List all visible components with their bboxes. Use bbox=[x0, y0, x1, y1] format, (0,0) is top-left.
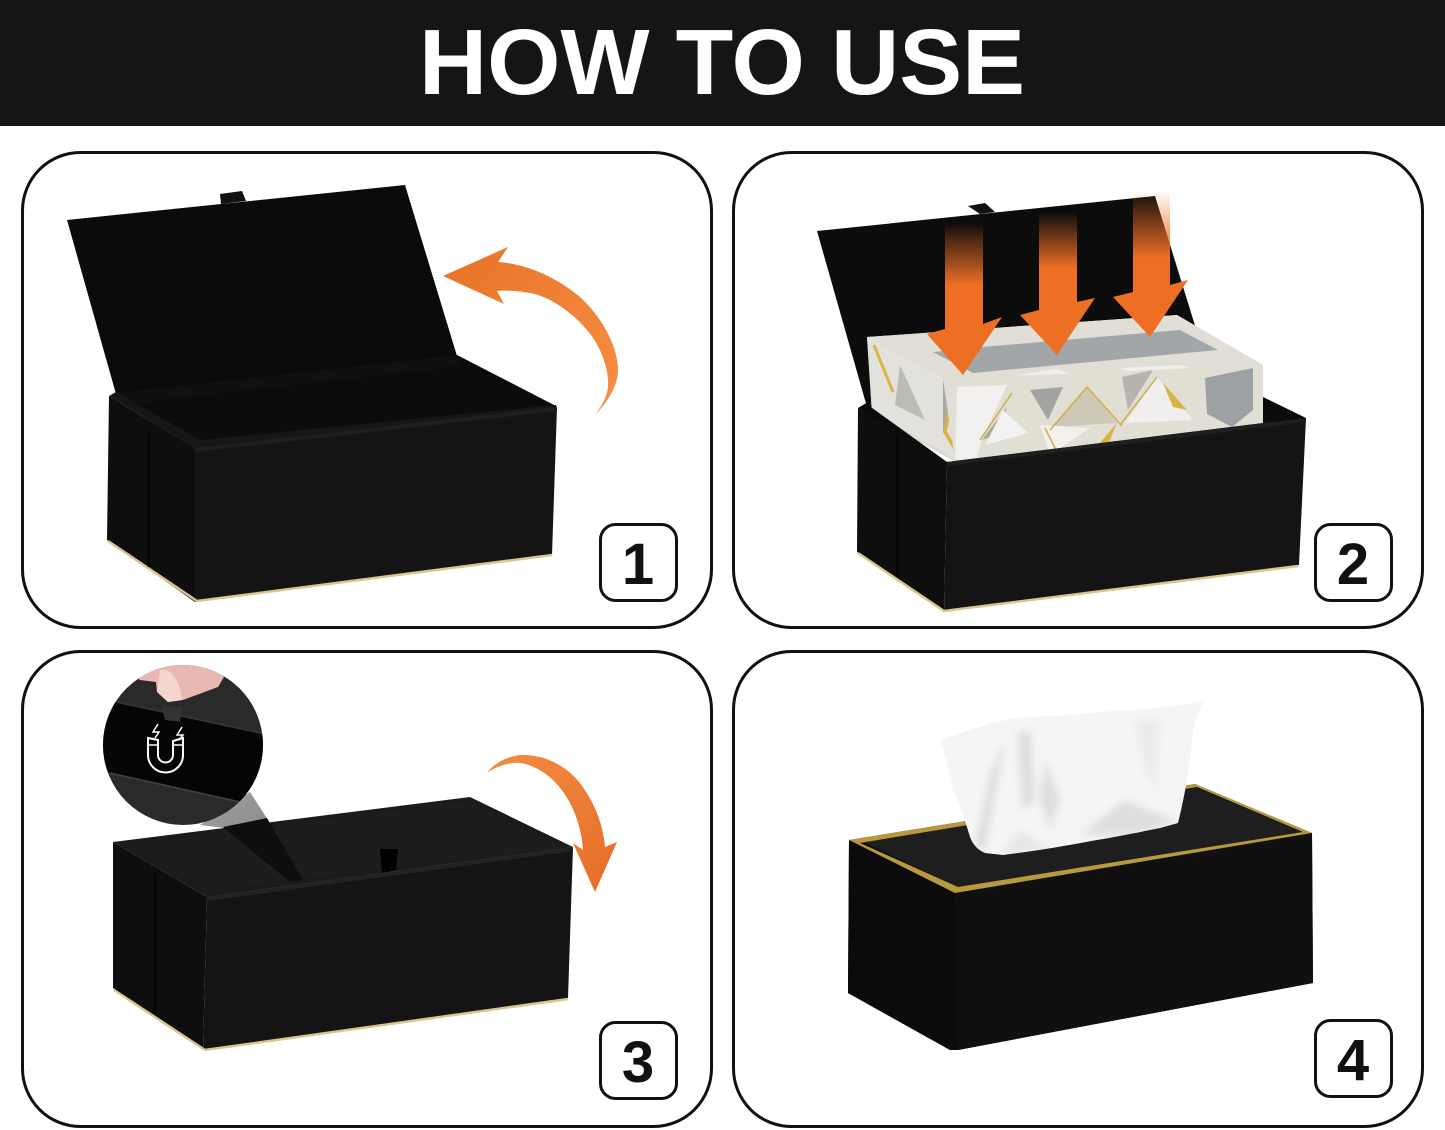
title: HOW TO USE bbox=[419, 10, 1025, 114]
magnet inset circle bbox=[103, 665, 263, 825]
tissue box bbox=[867, 315, 1263, 462]
step number 2: 2 bbox=[1337, 532, 1369, 597]
step number 3: 3 bbox=[622, 1030, 654, 1095]
panel: step 1 bbox=[22, 152, 712, 628]
icon: curved arrow bbox=[443, 247, 618, 415]
box top bbox=[863, 788, 1303, 887]
icon: down arrow 1 bbox=[927, 222, 1002, 375]
icon: magnet bbox=[148, 724, 183, 772]
box body bbox=[107, 355, 557, 602]
step number 1: 1 bbox=[622, 532, 654, 597]
tissue box front pattern bbox=[943, 365, 1263, 460]
step number 2 bbox=[1316, 524, 1392, 600]
step number 4 bbox=[1316, 1020, 1392, 1096]
icon: curved arrow bbox=[487, 755, 617, 892]
step number 3 bbox=[600, 1022, 676, 1098]
title banner bbox=[0, 0, 1445, 126]
open lid bbox=[817, 196, 1265, 415]
open lid bbox=[67, 185, 457, 394]
tissue bbox=[940, 700, 1204, 855]
panel: step 4 bbox=[734, 652, 1422, 1126]
icon: down arrow 2 bbox=[1020, 212, 1095, 355]
closed box with gold trim bbox=[848, 784, 1313, 1050]
finger bbox=[138, 665, 224, 702]
panel: step 2 bbox=[734, 152, 1422, 628]
magnifier beam bbox=[200, 792, 268, 828]
panel: step 3 bbox=[22, 652, 712, 1126]
kleenex badge bbox=[1205, 368, 1253, 427]
icon: down arrow 3 bbox=[1113, 190, 1188, 337]
tissue folds bbox=[975, 720, 1178, 855]
tissue box left face bbox=[867, 337, 957, 458]
closed box bbox=[113, 797, 573, 1050]
tissue box top face bbox=[867, 315, 1263, 379]
box body bbox=[857, 397, 1306, 612]
gold rim bbox=[849, 784, 1312, 893]
step number 1 bbox=[600, 524, 676, 600]
step number 4: 4 bbox=[1337, 1028, 1369, 1093]
